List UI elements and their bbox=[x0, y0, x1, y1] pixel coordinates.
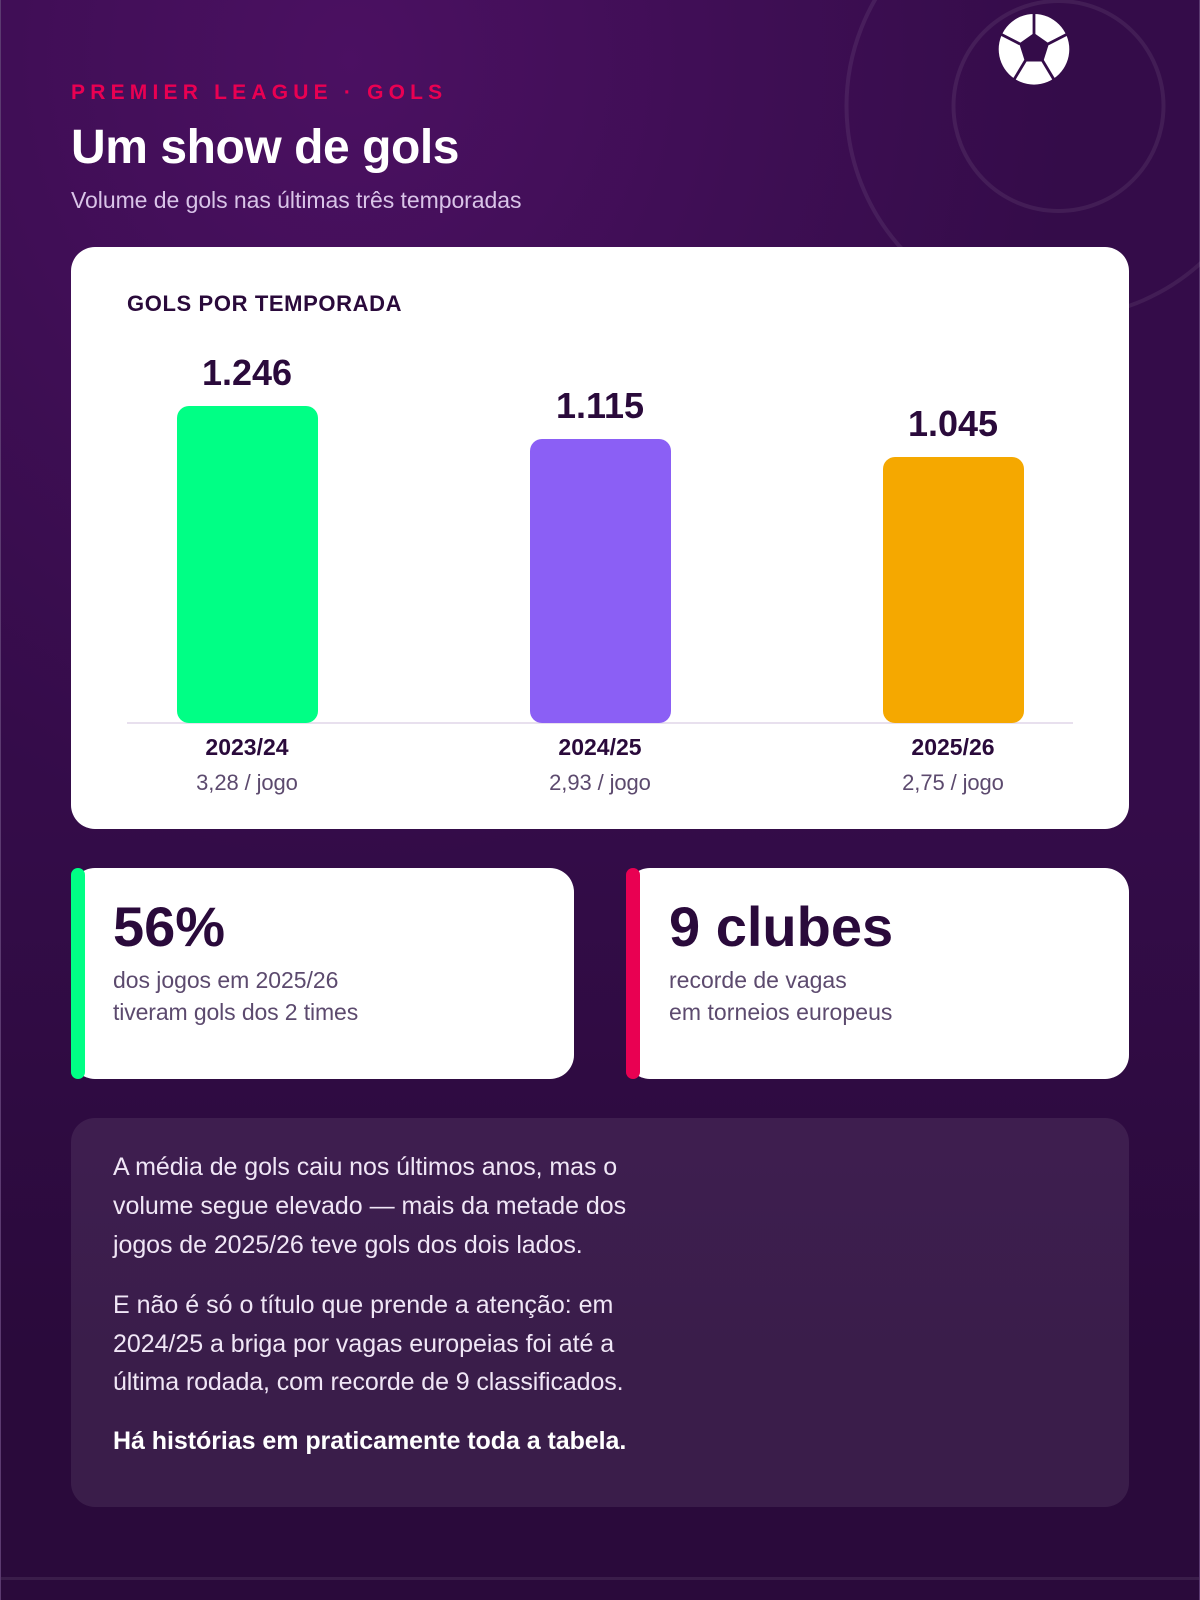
bar group: 2025/26 bbox=[883, 403, 1024, 795]
paragraph 2: última rodada, com recorde de 9 classificados. bbox=[113, 1368, 623, 1396]
stat description bbox=[669, 967, 892, 1025]
value 1.246: 1.246 bbox=[202, 352, 292, 393]
panel: narrative text bbox=[71, 1118, 1129, 1507]
panel: stat 9 clubes bbox=[626, 868, 1129, 1079]
bar group: 2024/25 bbox=[530, 385, 671, 795]
bar group: 2023/24 bbox=[177, 352, 318, 795]
eyebrow: PREMIER LEAGUE · GOLS bbox=[71, 81, 447, 104]
stat description: dos jogos em 2025/26 bbox=[113, 967, 338, 993]
subtitle: Volume de gols nas últimas três temporadas bbox=[71, 187, 521, 213]
goals per game 2024/25: 2,93 / jogo bbox=[549, 770, 651, 795]
label 2025/26: 2025/26 bbox=[911, 734, 995, 760]
value 1.115: 1.115 bbox=[556, 385, 644, 426]
icon: football bbox=[999, 13, 1069, 85]
bar 2024/25 bbox=[530, 439, 671, 723]
stat description: recorde de vagas bbox=[669, 967, 847, 993]
label 2023/24: 2023/24 bbox=[205, 734, 289, 760]
accent bar green bbox=[71, 868, 85, 1079]
decorative rings and football bbox=[844, 0, 1200, 308]
stat description bbox=[113, 967, 358, 1025]
title: Um show de gols bbox=[71, 121, 459, 174]
accent bar pink bbox=[626, 868, 640, 1079]
paragraph 2: E não é só o título que prende a atenção: em bbox=[113, 1291, 613, 1319]
paragraph 1: jogos de 2025/26 teve gols dos dois lados. bbox=[113, 1231, 583, 1259]
bar 2023/24 bbox=[177, 406, 318, 723]
stat value: 56% bbox=[113, 895, 225, 958]
paragraph 2: 2024/25 a briga por vagas europeias foi até a bbox=[113, 1330, 614, 1358]
stat value: 9 clubes bbox=[669, 895, 893, 958]
goals per game 2025/26: 2,75 / jogo bbox=[902, 770, 1004, 795]
stat description: em torneios europeus bbox=[669, 999, 892, 1025]
paragraph 1 bbox=[112, 1153, 626, 1259]
panel: bar chart card bbox=[71, 247, 1129, 829]
axis baseline bbox=[127, 722, 1073, 724]
panel: stat 56% bbox=[71, 868, 574, 1079]
goals per game 2023/24: 3,28 / jogo bbox=[196, 770, 298, 795]
closing statement: Há histórias em praticamente toda a tabela. bbox=[113, 1427, 626, 1455]
stat description: tiveram gols dos 2 times bbox=[113, 999, 358, 1025]
paragraph 2 bbox=[113, 1291, 623, 1396]
bar 2025/26 bbox=[883, 457, 1024, 723]
chart heading: GOLS POR TEMPORADA bbox=[127, 291, 402, 316]
paragraph 1: A média de gols caiu nos últimos anos, mas o bbox=[113, 1153, 617, 1181]
label 2024/25: 2024/25 bbox=[558, 734, 642, 760]
paragraph 1: volume segue elevado — mais da metade dos bbox=[113, 1192, 626, 1220]
value 1.045: 1.045 bbox=[908, 403, 998, 444]
